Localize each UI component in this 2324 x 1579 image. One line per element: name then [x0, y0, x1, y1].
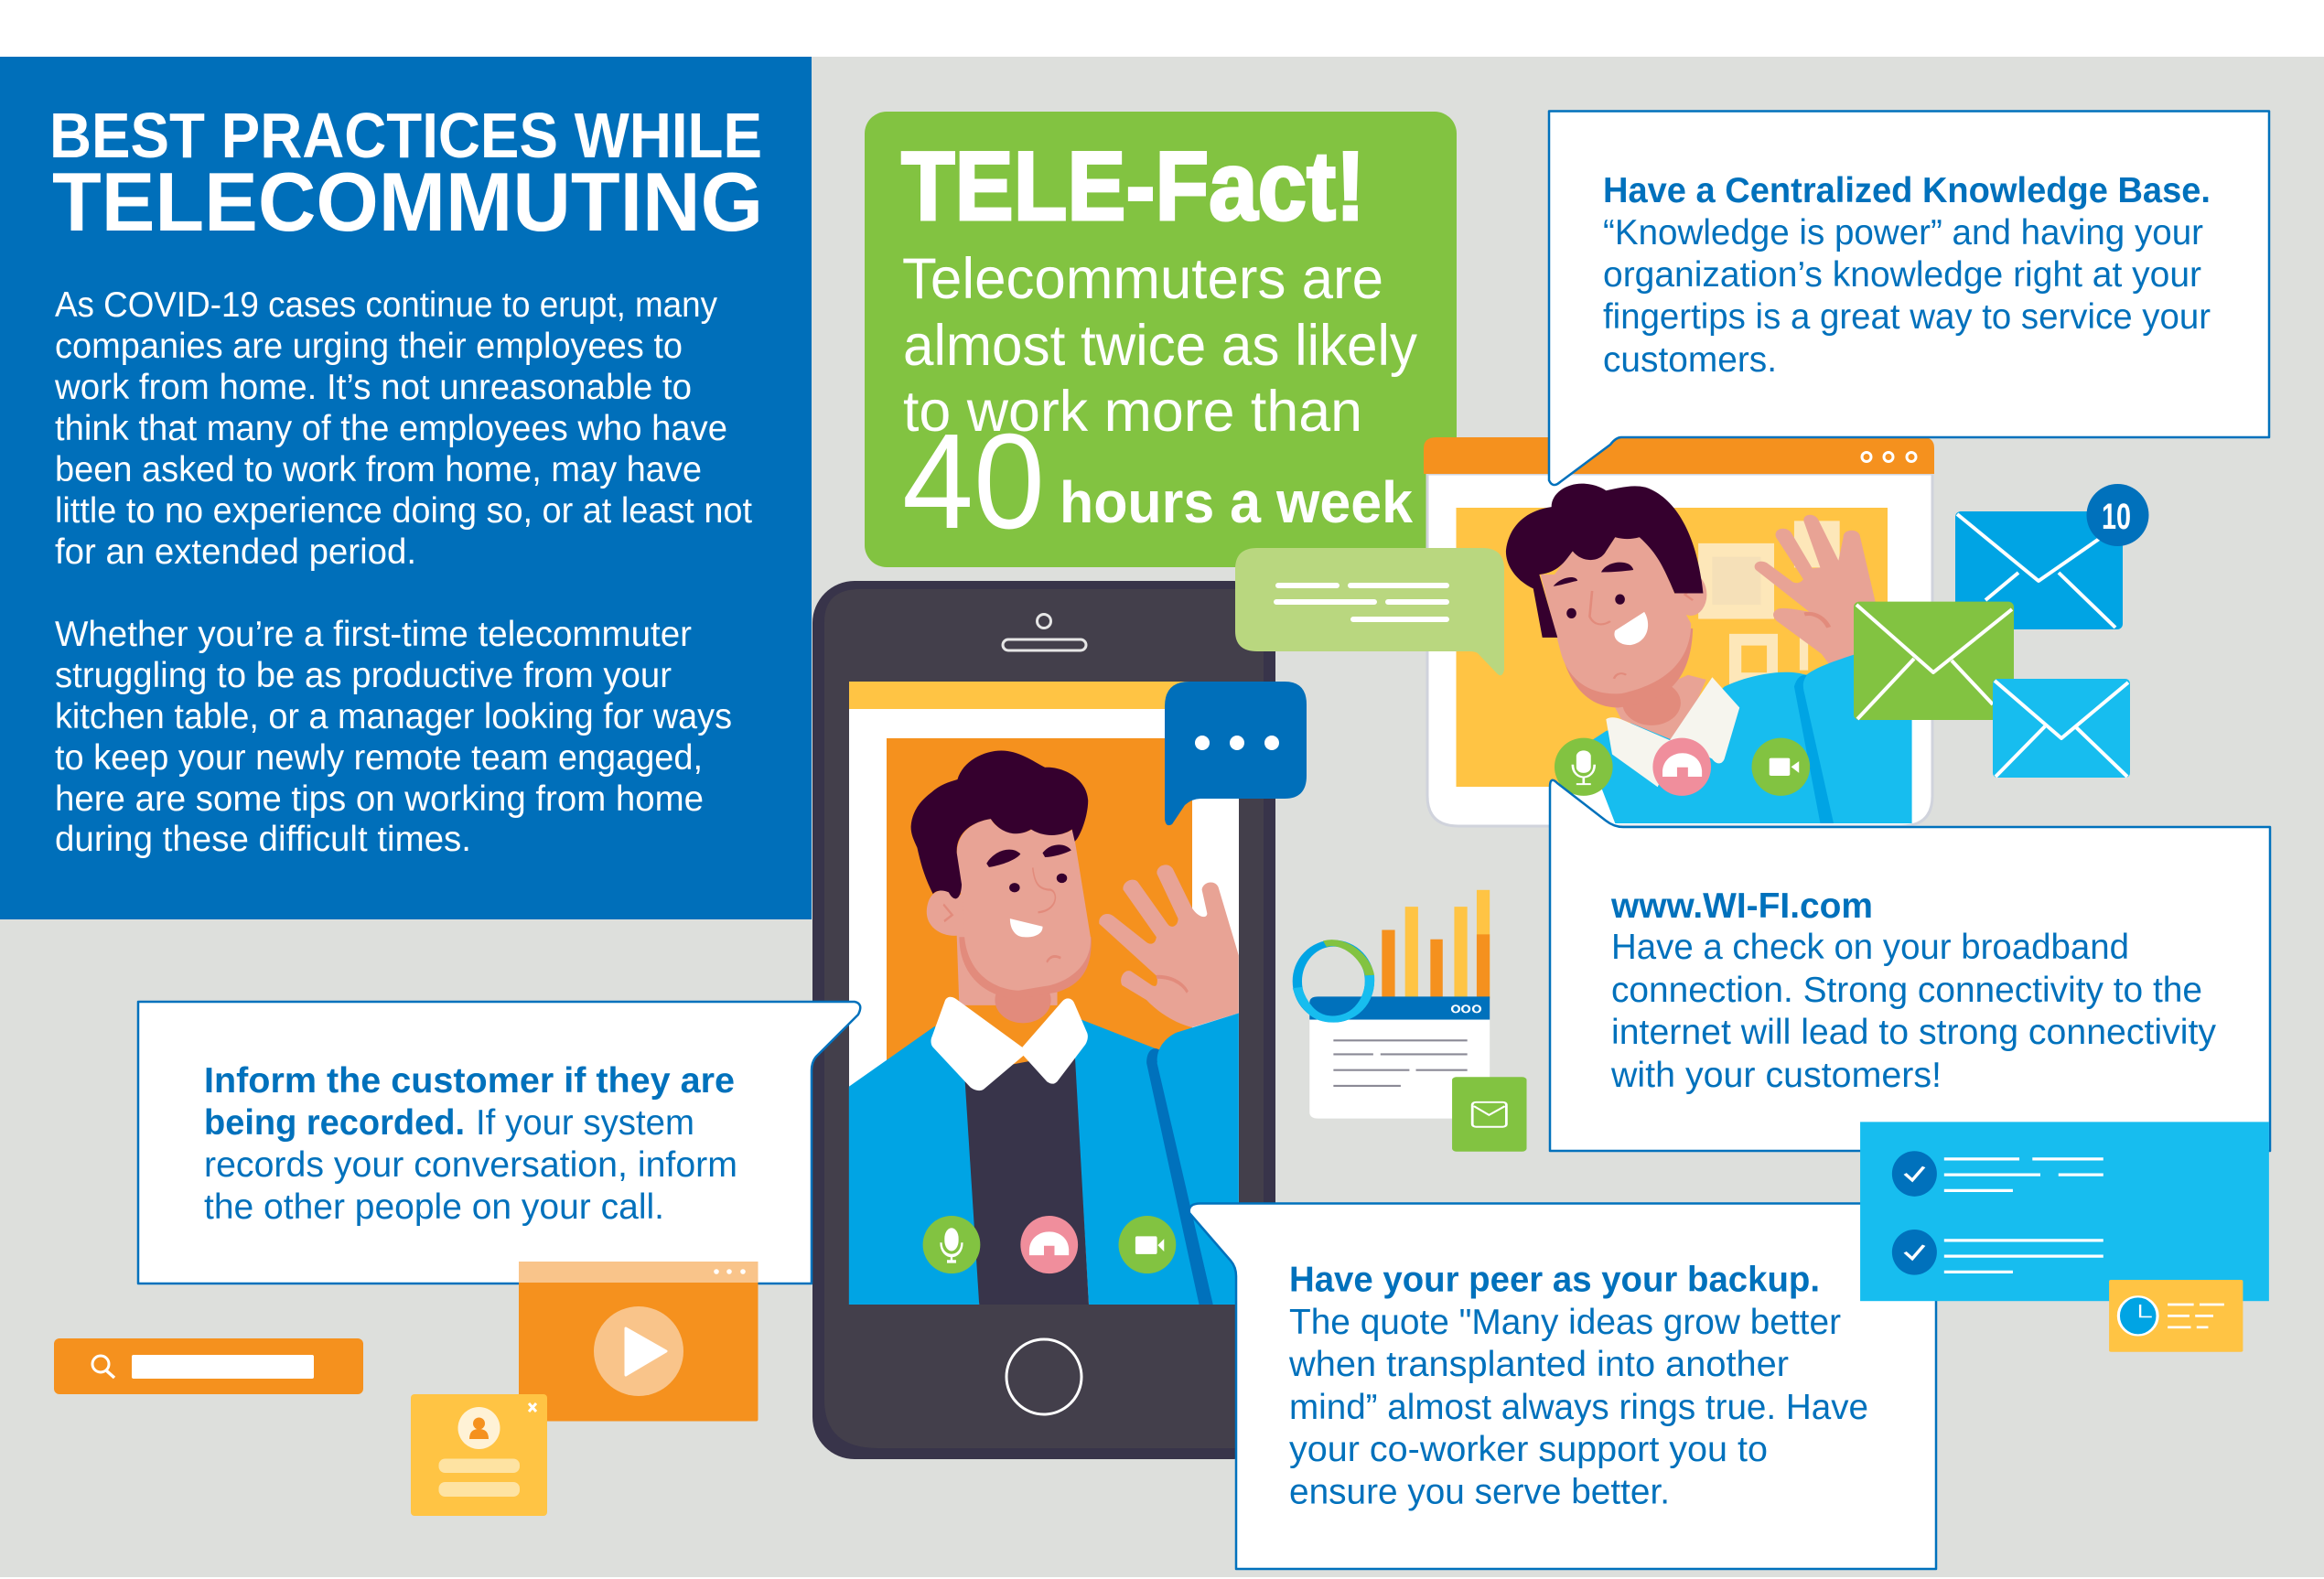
icon: light blue envelope — [1993, 679, 2130, 778]
man on phone — [849, 750, 1239, 1305]
man on tablet — [1506, 484, 1912, 823]
peer backup heading: Have your peer as your backup. — [1289, 1261, 1820, 1299]
title: TELECOMMUTING — [52, 156, 763, 249]
title: BEST PRACTICES WHILE — [49, 100, 762, 171]
intro paragraph 1: work from home. It’s not unreasonable to — [54, 368, 692, 407]
icon: video window — [519, 1262, 758, 1422]
knowledge base body: fingertips is a great way to service your — [1603, 297, 2211, 337]
inform customer text: Inform the customer if they are — [204, 1061, 735, 1101]
panel: intro — [0, 57, 812, 919]
peer backup body: ensure you serve better. — [1289, 1473, 1670, 1511]
intro paragraph 1: little to no experience doing so, or at least not — [55, 491, 752, 531]
hours a week: hours a week — [1060, 469, 1413, 535]
phone screen — [849, 682, 1239, 1305]
panel: tele-fact — [865, 112, 1457, 567]
phone speaker — [1003, 615, 1086, 650]
badge number: 10 — [2102, 497, 2131, 537]
wi-fi heading: www.WI-FI.com — [1610, 886, 1873, 926]
inform customer text: being recorded. — [204, 1103, 465, 1143]
title — [49, 100, 763, 249]
inform customer text — [204, 1061, 737, 1227]
intro paragraph 1: As COVID-19 cases continue to erupt, many — [55, 285, 717, 325]
call buttons on phone — [923, 1216, 1176, 1273]
inform customer text: records your conversation, inform — [204, 1145, 737, 1185]
inform customer text: the other people on your call. — [204, 1187, 664, 1227]
icon: typing speech bubble — [1165, 682, 1307, 825]
icon: green speech bubble — [1235, 548, 1504, 675]
intro paragraph 2: Whether you’re a first-time telecommuter — [55, 615, 692, 654]
tele-fact statement — [902, 247, 1417, 444]
call buttons on tablet — [1555, 738, 1810, 796]
icon: search bar — [54, 1338, 363, 1394]
knowledge base body: organization’s knowledge right at your — [1603, 255, 2201, 295]
tele-fact statement: Telecommuters are — [902, 247, 1383, 311]
illustration: chart window — [1297, 890, 1527, 1152]
intro paragraph 1 — [54, 285, 752, 572]
icon: blue envelope with badge — [1955, 484, 2148, 629]
intro paragraph 1: for an extended period. — [55, 532, 416, 572]
peer backup body: when transplanted into another — [1288, 1345, 1789, 1384]
knowledge base body: “Knowledge is power” and having your — [1603, 213, 2203, 252]
wi-fi body: internet will lead to strong connectivity — [1611, 1013, 2216, 1052]
wi-fi body — [1610, 928, 2216, 1095]
callout: knowledge base — [1549, 112, 2269, 485]
illustration: checklist panel — [1860, 1122, 2269, 1352]
ring gauge — [1297, 943, 1370, 1019]
illustration: tablet — [1424, 437, 1934, 826]
icon: profile card — [411, 1394, 547, 1516]
tele-fact heading: TELE-Fact! — [901, 131, 1365, 241]
icon: mail tile — [1452, 1077, 1527, 1152]
phone home button — [1006, 1339, 1081, 1414]
intro paragraph 1: think that many of the employees who have — [55, 409, 727, 448]
knowledge base body: customers. — [1603, 340, 1777, 380]
tele-fact statement: to work more than — [903, 380, 1362, 444]
knowledge base heading: Have a Centralized Knowledge Base. — [1603, 171, 2211, 210]
intro paragraph 2: to keep your newly remote team engaged, — [55, 738, 703, 778]
intro paragraph 2: struggling to be as productive from your — [55, 656, 672, 695]
big number 40: 40 — [902, 406, 1045, 557]
intro paragraph 1: been asked to work from home, may have — [55, 450, 702, 489]
icon: clock card — [2109, 1280, 2243, 1352]
icon: green envelope — [1854, 602, 2014, 720]
peer backup body: your co-worker support you to — [1289, 1430, 1768, 1469]
wi-fi body: connection. Strong connectivity to the — [1611, 971, 2202, 1010]
callout: wi-fi — [1550, 780, 2270, 1151]
peer backup body: mind” almost always rings true. Have — [1289, 1388, 1868, 1427]
intro paragraph 2: kitchen table, or a manager looking for ways — [55, 697, 732, 736]
wi-fi body: with your customers! — [1610, 1056, 1942, 1095]
intro paragraph 2: here are some tips on working from home — [55, 779, 704, 819]
illustration: phone — [812, 581, 1275, 1459]
wi-fi body: Have a check on your broadband — [1611, 928, 2129, 967]
callout: peer backup — [1189, 1204, 1936, 1569]
intro paragraph 2 — [55, 615, 732, 859]
peer backup body: The quote "Many ideas grow better — [1289, 1303, 1841, 1342]
inform customer text: If your system — [476, 1103, 694, 1143]
peer backup body — [1288, 1303, 1868, 1511]
callout: inform customer — [138, 1002, 860, 1284]
intro paragraph 1: companies are urging their employees to — [55, 327, 683, 366]
intro paragraph 2: during these difficult times. — [55, 820, 471, 859]
knowledge base body — [1603, 213, 2211, 380]
tele-fact statement: almost twice as likely — [903, 314, 1417, 378]
